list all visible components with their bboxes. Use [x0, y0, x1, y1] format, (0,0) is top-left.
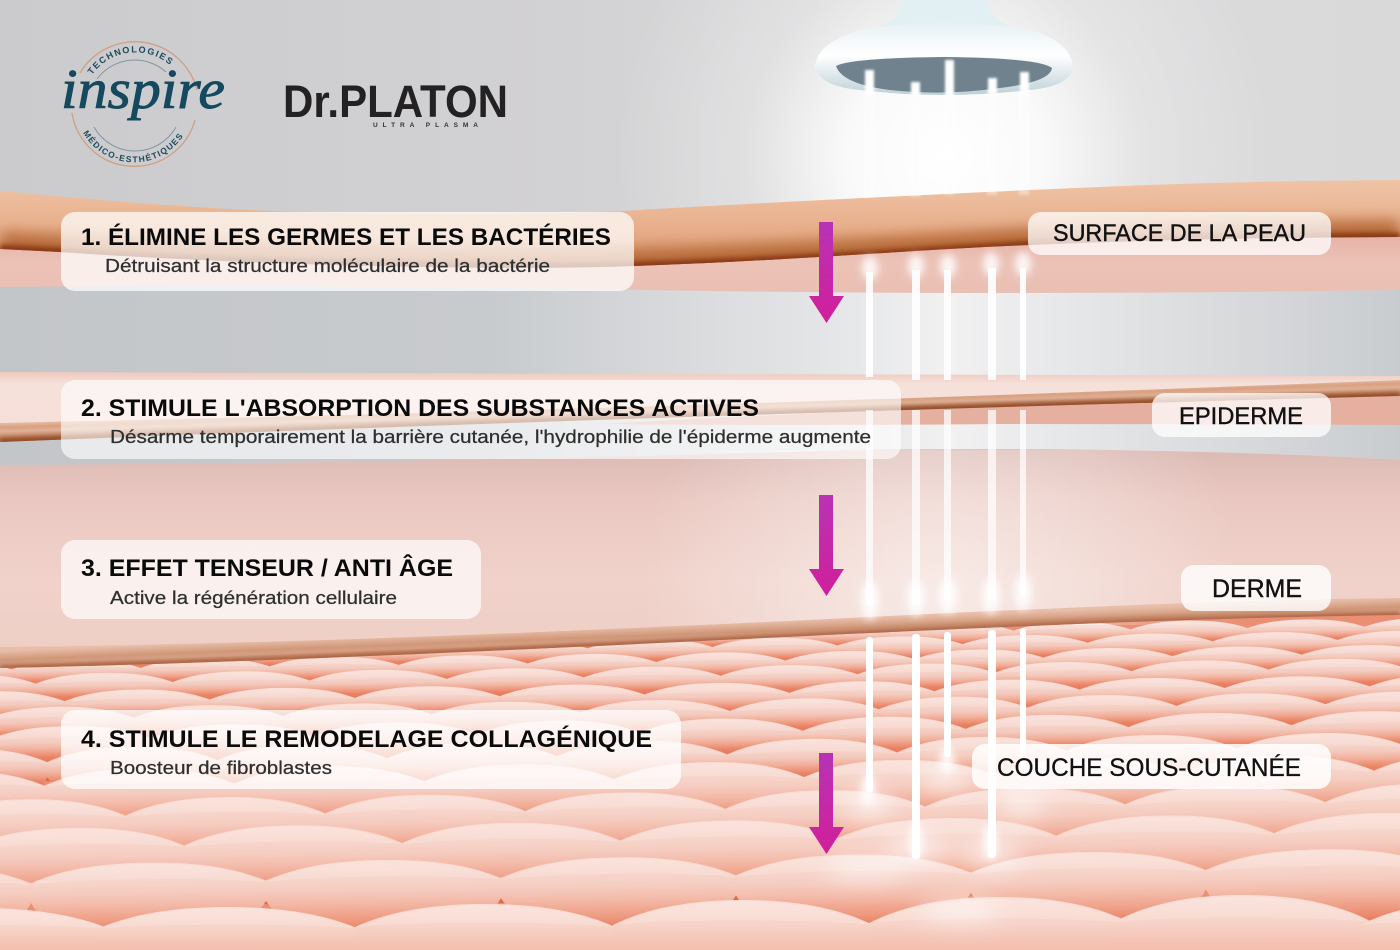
heading: 3. EFFET TENSEUR / ANTI ÂGE: [81, 554, 453, 582]
panel: step 4: [61, 710, 681, 789]
arrow 1: [809, 222, 844, 323]
logo: Inspire: [61, 41, 225, 167]
label: epiderme: [1152, 393, 1331, 437]
plasma device head: [815, 0, 1073, 96]
subcutaneous cells: [0, 610, 1400, 950]
logo text: technologies: TECHNOLOGIES: [87, 46, 172, 74]
label: surface de la peau: SURFACE DE LA PEAU: [1053, 220, 1306, 247]
label: couche sous-cutanée: COUCHE SOUS-CUTANÉE: [997, 753, 1301, 782]
label: derme: [1181, 565, 1331, 611]
label: couche sous-cutanée: [972, 744, 1331, 789]
panel: step 3: [61, 540, 481, 619]
heading: 4. STIMULE LE REMODELAGE COLLAGÉNIQUE: [81, 725, 652, 753]
description: Détruisant la structure moléculaire de la bactérie: [105, 255, 550, 276]
description: Active la régénération cellulaire: [110, 587, 397, 608]
label: derme: DERME: [1212, 575, 1302, 603]
description: Boosteur de fibroblastes: [110, 757, 332, 778]
logo: Dr. Platon: Dr.PLATON: [283, 76, 508, 127]
logo: Dr. Platon: ULTRA PLASMA: [373, 122, 478, 129]
logo wordmark: inspire: [61, 59, 225, 121]
skin layer: epidermis: [0, 372, 1400, 442]
arrow 3: [809, 753, 844, 854]
description: Désarme temporairement la barrière cutanée, l'hydrophilie de l'épiderme augmente: [110, 426, 871, 447]
panel: step 1: [61, 212, 634, 291]
logo text: médico-esthétiques: MÉDICO-ESTHÉTIQUES: [83, 130, 182, 162]
label: surface de la peau: [1028, 212, 1331, 255]
arrow 2: [809, 495, 844, 596]
panel: step 2: [61, 380, 901, 459]
heading: 1. ÉLIMINE LES GERMES ET LES BACTÉRIES: [81, 223, 611, 251]
skin layer: dermis: [0, 449, 1400, 650]
background: [0, 0, 1400, 475]
skin layer: surface: [0, 180, 1400, 293]
skin layer: dermis boundary: [0, 598, 1400, 668]
label: epiderme: EPIDERME: [1179, 403, 1303, 430]
heading: 2. STIMULE L'ABSORPTION DES SUBSTANCES ACTIVES: [81, 395, 759, 422]
plasma beams: [825, 92, 1044, 920]
